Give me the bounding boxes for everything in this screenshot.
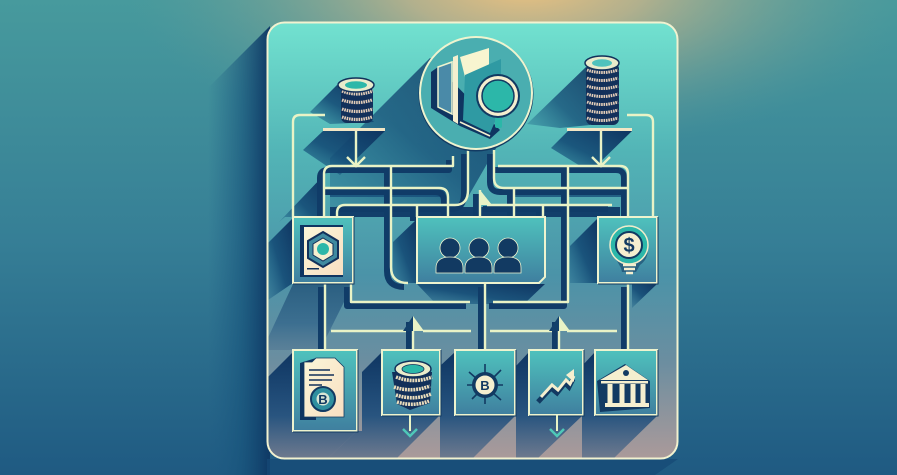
bottom panel shadow — [267, 459, 678, 475]
card: bitcoin document: B — [318, 392, 328, 407]
card: rising chart arrow — [529, 350, 584, 416]
lower horizontal connectors — [331, 330, 617, 332]
centre upward arrow — [480, 190, 492, 205]
card: coins — [382, 350, 441, 416]
card: dollar lightbulb — [598, 217, 658, 284]
icon: magnifier over documents — [418, 36, 534, 152]
right coin platform — [567, 128, 632, 131]
down arrow: chart — [550, 415, 564, 436]
card: bitcoin document — [293, 350, 358, 432]
icon: three people — [436, 238, 521, 273]
connector line shadows — [320, 154, 624, 354]
card: bank building — [595, 350, 658, 416]
left coin platform — [323, 128, 385, 131]
cast shadows — [267, 58, 657, 459]
card: bitcoin sun — [455, 350, 516, 416]
card: hexagon document — [293, 217, 354, 284]
outer connector: right — [627, 115, 653, 217]
down arrow: coins — [403, 415, 417, 436]
connector lines — [324, 150, 628, 350]
icon: right coin stack — [585, 56, 619, 125]
panel: team box — [417, 217, 545, 283]
lower upward arrows — [403, 316, 570, 331]
card: dollar lightbulb: $ — [623, 235, 635, 257]
top arrows from coins — [347, 131, 610, 166]
main panel — [267, 22, 678, 459]
icon: left coin stack — [338, 78, 374, 123]
panel shadow — [208, 26, 270, 475]
outer connector: left — [293, 115, 325, 217]
card: bitcoin sun: B — [480, 378, 490, 393]
